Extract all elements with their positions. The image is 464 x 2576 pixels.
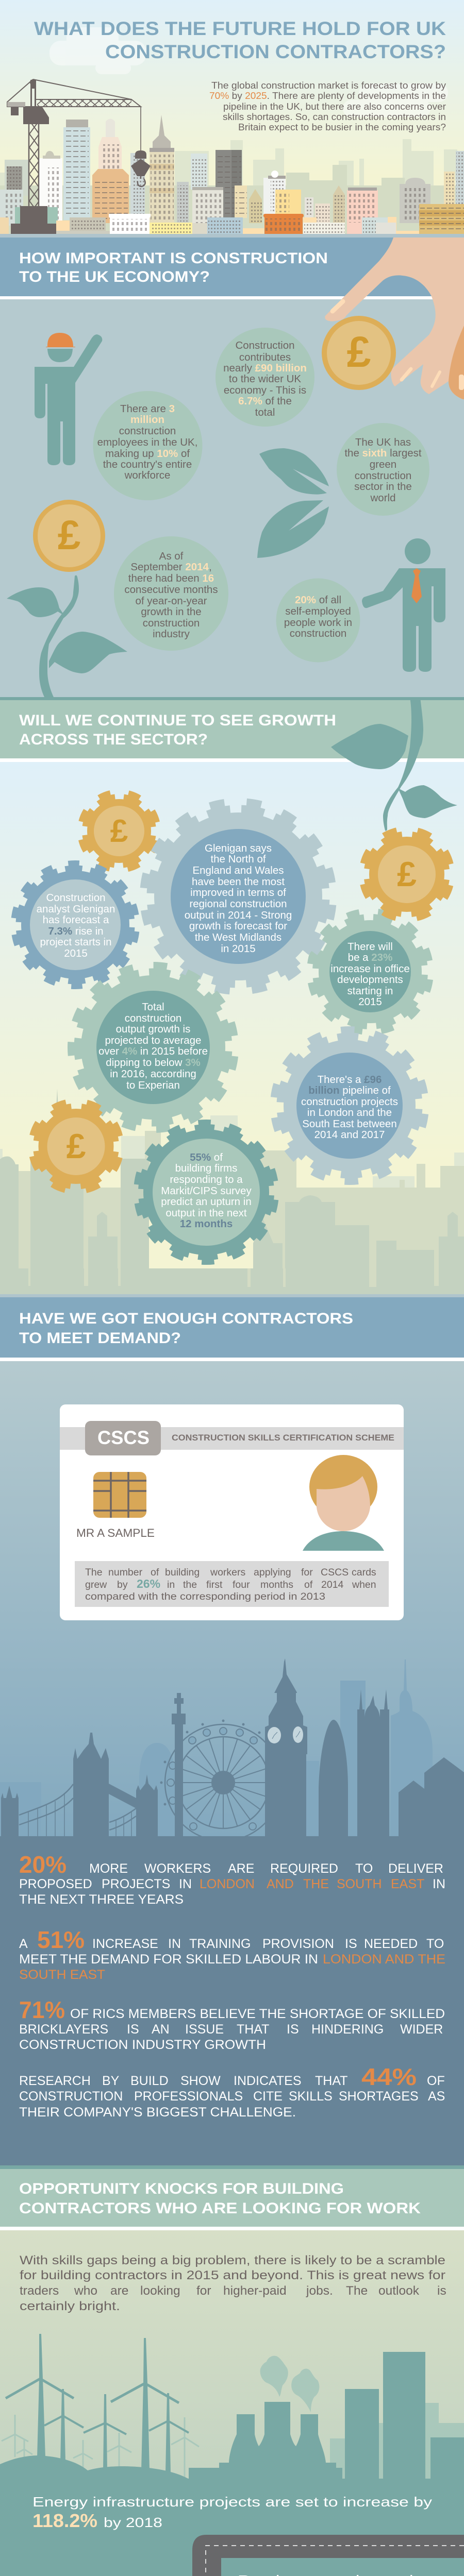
Big Ben [265,1658,307,1836]
gear: 55% firms: building firms [175,1162,237,1174]
card statistic box: of [151,1567,159,1578]
gear: North of England: England and Wales [192,865,284,876]
intro: skills gaps: traders [20,2284,59,2298]
Parliament [357,1689,389,1836]
Tower Bridge [1,1733,158,1836]
gear: North of England: growth is forecast for [189,920,287,932]
stat: 20 percent workers: THE NEXT THREE YEARS [19,1892,184,1907]
stat: 44 percent Build Show: OF [427,2074,445,2088]
bubble: 16 months growth: there had been 16 [128,572,214,584]
intro: skills gaps: is [437,2284,446,2298]
stat: 71 percent RICS: IS [287,2022,299,2037]
card statistic box: building [165,1567,200,1578]
stat: 44 percent Build Show: THAT [315,2074,347,2088]
stat: 44 percent Build Show: SKILLS [289,2089,333,2104]
card statistic box: of [304,1579,313,1590]
heading: opportunity knocks: CONTRACTORS WHO ARE LOOKING FOR WORK [19,2200,421,2217]
stat: 51 percent training: TRAINING [189,1937,251,1951]
stat: 20 percent workers: IN [433,1877,445,1891]
clouds [49,27,448,117]
stat: 71 percent RICS: THAT [237,2022,269,2037]
stat: 44 percent Build Show: THEIR COMPANY'S BIGGEST CHALLENGE. [19,2105,296,2120]
bubble: 16 months growth: growth in the [141,606,202,618]
stat: energy projects: 118.2% [32,2510,97,2531]
gear: output growth: in 2016, according [110,1068,196,1080]
bubble: 90 billion: total [255,406,275,418]
panel: growth header band [0,700,464,758]
bubble: 90 billion: contributes [239,351,291,363]
stat: 20 percent workers: REQUIRED [270,1861,338,1876]
stat: 44 percent Build Show: BY [102,2074,120,2088]
stat: 20 percent workers: IN [179,1877,192,1891]
city buildings [0,115,464,234]
stat: 44 percent Build Show: SHORTAGES [339,2089,419,2104]
stat: 51 percent training: 51% [37,1926,85,1953]
London Eye [165,1724,281,1841]
icon: construction worker [35,333,102,465]
Houses [399,1757,464,1836]
icon: card chip [93,1472,146,1518]
bubble: 3 million employees: There are 3 [120,403,175,415]
stat: 44 percent Build Show: SHOW [180,2074,221,2088]
gear: North of England: output in 2014 - Strong [185,909,292,921]
gear: North of England [137,795,339,997]
bubble: self-employed: construction [290,628,346,639]
heading: opportunity knocks: OPPORTUNITY KNOCKS FOR BUILDING [19,2180,344,2197]
bubble: sixth largest [337,423,429,516]
stat: 51 percent training: IN [168,1937,181,1951]
gear: 55% firms: output in the next [165,1207,247,1219]
ground strip [0,234,464,238]
stat: 44 percent Build Show: PROFESSIONALS [134,2089,243,2104]
stat: 51 percent training: IS [345,1937,357,1951]
bubble: sixth largest: The UK has [355,436,411,448]
card scheme name: CONSTRUCTION SKILLS CERTIFICATION SCHEME [172,1433,394,1443]
card statistic box: 2014 [321,1579,344,1590]
bubble: 16 months growth: industry [153,628,190,640]
bubble: 3 million employees: the country's entire [103,459,192,470]
heading: will we continue: WILL WE CONTINUE TO SEE GROWTH [19,712,336,729]
gear: coin upper left [73,785,165,877]
illustration: wind farm [0,2334,199,2479]
CSCS card [60,1404,404,1620]
intro: skills gaps: looking [140,2284,180,2298]
card statistic box: compared with the corresponding period in 2013 [85,1591,325,1602]
gear: output growth: over 4% in 2015 before [98,1045,208,1057]
white divider [0,296,464,299]
stat: 44 percent Build Show [19,2063,445,2120]
stat: energy projects: Energy infrastructure projects are set to increase by [32,2494,432,2510]
bubble: sixth largest: world [370,492,396,504]
gear: output growth [64,958,242,1137]
bubble: 3 million employees: construction [119,425,176,437]
intro text: skills shortages. So, can construction contractors in [223,111,446,122]
stat: 20 percent workers: LONDON [200,1877,255,1891]
intro text: Britain expect to be busier in the coming years? [238,122,446,132]
card statistic box: for [301,1567,313,1578]
gear: North of England: in 2015 [221,943,256,955]
gear: 96 billion pipeline: in London and the [307,1107,392,1118]
stat: 44 percent Build Show: CONSTRUCTION [19,2089,123,2104]
heading: have we got enough: TO MEET DEMAND? [19,1330,181,1347]
gear: Glenigan forecast [8,858,142,992]
stat: 71 percent RICS: OF RICS MEMBERS BELIEVE THE SHORTAGE OF SKILLED [70,2007,445,2021]
bubble: self-employed: people work in [284,617,352,629]
gear: coin lower left [22,1093,130,1200]
stat: 51 percent training: MEET THE DEMAND FOR SKILLED LABOUR IN [19,1952,318,1967]
gear: North of England: the North of [210,853,266,865]
stat: 51 percent training: NEEDED [364,1937,418,1951]
stat: 51 percent training: SOUTH EAST [19,1968,105,1982]
stat: 20 percent workers: MORE [89,1861,128,1876]
bubble: sixth largest: the sixth largest [344,447,422,459]
stat: 71 percent RICS [19,1996,445,2052]
gear: Glenigan forecast: analyst Glenigan [37,903,115,915]
stat: 71 percent RICS: 71% [19,1996,65,2023]
card statistic box: in [167,1579,175,1590]
ground strip [0,1294,464,1297]
gear: North of England: have been the most [192,876,285,888]
stat: 20 percent workers: WORKERS [144,1861,211,1876]
panel: demand section background [0,1361,464,1836]
bubble: 90 billion: Construction [235,340,295,351]
gear: output growth: to Experian [126,1079,180,1091]
gear: 55% firms [130,1116,283,1268]
gear: 55% firms: 12 months [180,1218,233,1230]
teal divider [0,697,464,700]
card statistic box: by [117,1579,128,1590]
stat: 44 percent Build Show: AS [428,2089,445,2104]
gear: coin lower left: £ [67,1127,86,1166]
gear: 96 billion pipeline: 2014 and 2017 [314,1129,385,1141]
card holder name: MR A SAMPLE [76,1527,155,1539]
stat: 44 percent Build Show: RESEARCH [19,2074,91,2088]
stat: 51 percent training: LONDON AND THE [323,1952,445,1967]
gear: teal office: starting in [347,985,393,997]
gear: 55% firms: responding to a [170,1174,243,1185]
intro: skills gaps: outlook [378,2284,420,2298]
stat: 51 percent training: INCREASE [92,1937,158,1951]
gear: North of England: regional construction [189,898,287,910]
stat: 44 percent Build Show: INDICATES [234,2074,301,2088]
bubble: 3 million employees: employees in the UK, [97,436,197,448]
white divider [0,2227,464,2230]
skyline: growth section [0,1089,464,1294]
title [34,18,446,62]
stat: 51 percent training: TO [426,1937,444,1951]
gear: 96 billion pipeline: South East between [302,1118,397,1130]
gear: 96 billion pipeline: There's a £96 [318,1074,382,1086]
London skyline [0,1658,464,1841]
intro text: The global construction market is forecast to grow by [211,80,446,91]
intro: skills gaps: The [346,2284,368,2298]
stat: 51 percent training [19,1926,445,1982]
intro: skills gaps: are [110,2284,128,2298]
bubble: 16 months growth: consecutive months [124,584,218,596]
card statistic box: applying [254,1567,291,1578]
panel: opportunity header band [0,2169,464,2227]
card statistic box [75,1561,389,1607]
gear: teal office: increase in office [330,963,410,975]
stat: 71 percent RICS: ISSUE [185,2022,224,2037]
heading: have we got enough [19,1310,353,1347]
bubble: sixth largest: green [370,459,396,470]
bubble: sixth largest: construction [355,470,411,482]
stat: 44 percent Build Show: BUILD [130,2074,169,2088]
card statistic box: first [206,1579,223,1590]
stat: 20 percent workers: PROJECTS [102,1877,170,1891]
stat: energy projects [32,2494,432,2531]
gear: Glenigan forecast: Construction [46,892,106,904]
stat: 20 percent workers: THE [303,1877,329,1891]
illustration: road [20,2535,464,2576]
heading: how important: HOW IMPORTANT IS CONSTRUCTION [19,250,328,267]
card statistic box: the [183,1579,197,1590]
BT Tower [172,1693,186,1836]
CSCS badge [85,1421,161,1455]
card statistic box: four [233,1579,250,1590]
icon: hand holding coin: £ [347,328,371,376]
gear: Glenigan forecast: project starts in [40,936,111,948]
bubble: 16 months growth: of year-on-year [135,595,207,607]
portrait [303,1455,384,1551]
heading: how important: TO THE UK ECONOMY? [19,268,210,285]
card statistic box: The [85,1567,103,1578]
stat: 20 percent workers: EAST [391,1877,424,1891]
white divider [0,758,464,762]
stat: 71 percent RICS: WIDER [400,2022,443,2037]
title: WHAT DOES THE FUTURE HOLD FOR UK [34,18,446,39]
intro: skills gaps: certainly bright. [20,2299,120,2313]
stat: 20 percent workers: DELIVER [388,1861,443,1876]
gear: teal office [304,905,437,1038]
bubble: 3 million employees: workforce [124,469,170,481]
panel: demand header band [0,1297,464,1358]
icon: businessman [362,538,445,672]
gear: North of England: the West Midlands [195,931,281,943]
intro: skills gaps: With skills gaps being a big problem, there is likely to be a scramble [20,2253,445,2267]
stat: 71 percent RICS: IS [127,2022,139,2037]
gear: coin upper right [353,821,460,928]
intro: skills gaps [20,2253,446,2313]
bubble: 3 million employees: making up 10% of [105,448,190,460]
bubble: self-employed: self-employed [285,605,351,617]
bubble: 90 billion: economy - This is [224,384,306,396]
gear: teal office: be a 23% [348,952,392,963]
stat: 51 percent training: A [19,1937,28,1951]
gear: output growth: output growth is [116,1023,190,1035]
gear: Glenigan forecast: 2015 [64,947,88,959]
panel: growth section sky [0,762,464,1294]
card statistic box: 26% [137,1577,160,1590]
Gherkin [319,1720,348,1836]
icon: coin plant: £ [58,512,80,558]
stat: 20 percent workers: 20% [19,1851,67,1878]
gear: Glenigan forecast: 7.3% rise in [48,925,104,937]
panel: economy section background [0,299,464,697]
stat: 44 percent Build Show: 44% [361,2063,417,2090]
bubble: 3 million employees [93,391,202,500]
intro text: pipeline in the UK, but there are also concerns over [223,101,446,112]
CSCS badge: CSCS [97,1427,150,1448]
heading: how important [19,250,328,285]
leaves: centre [257,448,329,558]
heading: have we got enough: HAVE WE GOT ENOUGH CONTRACTORS [19,1310,353,1327]
card statistic box: cards [352,1567,376,1578]
gear: teal office: 2015 [358,996,382,1008]
panel: hero sky background [0,0,464,234]
bubble: 16 months growth: As of [159,550,184,562]
stem with leaves [331,697,457,831]
card statistic box: workers [210,1567,246,1578]
illustration: power station [189,2352,464,2479]
stat: 20 percent workers: TO [355,1861,373,1876]
gear: 96 billion pipeline: construction projects [301,1096,398,1108]
card statistic box: number [108,1567,143,1578]
gear: 55% firms: Markit/CIPS survey [161,1185,252,1197]
bubble: self-employed: 20% of all [295,594,341,606]
bubble: 16 months growth [114,536,228,651]
gear: output growth: projected to average [105,1035,201,1046]
panel: skills statistics background [0,1836,464,2165]
bubble: 90 billion: nearly £90 billion [223,362,307,374]
heading: will we continue: ACROSS THE SECTOR? [19,731,208,748]
stat: 20 percent workers: AND [267,1877,294,1891]
bubble: self-employed [276,578,360,663]
intro text [209,80,446,132]
heading: will we continue [19,712,336,748]
card statistic box: months [260,1579,293,1590]
intro text: 70% by 2025. There are plenty of developments in the [209,90,446,101]
intro: skills gaps: for building contractors in 2015 and beyond. This is great news for [20,2268,445,2282]
stat: 20 percent workers: PROPOSED [19,1877,92,1891]
card statistic box: when [352,1579,376,1590]
gear: 96 billion pipeline: billion pipeline of [308,1084,391,1096]
bubble: 90 billion: 6.7% of the [238,395,292,407]
card statistic box: grew [85,1579,107,1590]
intro: skills gaps: for [196,2284,211,2298]
gear: Glenigan forecast: has forecast a [43,914,109,926]
icon: hand holding coin [322,238,464,399]
card statistic box: CSCS [321,1567,349,1578]
gear: coin upper right: £ [397,855,417,894]
gear: North of England: improved in terms of [190,887,286,899]
stat: 71 percent RICS: CONSTRUCTION INDUSTRY GROWTH [19,2038,266,2052]
title: CONSTRUCTION CONTRACTORS? [105,41,446,62]
gear: output growth: Total [142,1001,164,1013]
icon: coin plant [7,500,127,697]
heading: opportunity knocks [19,2180,421,2217]
intro: skills gaps: higher-paid [223,2284,287,2298]
gear: 55% firms: 55% of [190,1151,223,1163]
gear: teal office: There will [347,941,393,953]
stat: 71 percent RICS: BRICKLAYERS [19,2022,108,2037]
panel: infrastructure background [0,2479,464,2576]
stat: 20 percent workers: ARE [228,1861,254,1876]
crane [7,79,151,234]
bubble: 16 months growth: September 2014, [130,561,212,573]
white divider [0,1358,464,1361]
stat: 51 percent training: PROVISION [262,1937,334,1951]
gear: 96 billion pipeline [267,1023,432,1188]
stat: 20 percent workers [19,1851,445,1907]
intro: skills gaps: who [74,2284,97,2298]
pale background skyline [0,139,464,234]
stat: energy projects: by 2018 [104,2515,162,2530]
gear: output growth: dipping to below 3% [106,1057,201,1069]
teal divider [0,2165,464,2169]
bubble: 3 million employees: million [130,414,164,426]
panel: opportunity section background [0,2230,464,2479]
stat: 44 percent Build Show: CITE [253,2089,283,2104]
bubble: 16 months growth: construction [143,617,200,629]
intro: skills gaps: jobs. [306,2284,333,2298]
bubble: 90 billion [216,328,314,427]
gear: 55% firms: predict an upturn in [161,1196,252,1208]
gear: teal office: developments [337,974,403,986]
stat: 71 percent RICS: HINDERING [311,2022,384,2037]
stat: 71 percent RICS: AN [152,2022,170,2037]
gear: coin upper left: £ [110,814,128,849]
bubble: sixth largest: sector in the [354,481,412,493]
gear: output growth: construction [125,1012,181,1024]
bubble: 90 billion: to the wider UK [229,373,301,385]
gear: North of England: Glenigan says [205,842,272,854]
panel: economy header band [0,238,464,296]
stat: 20 percent workers: SOUTH [337,1877,382,1891]
